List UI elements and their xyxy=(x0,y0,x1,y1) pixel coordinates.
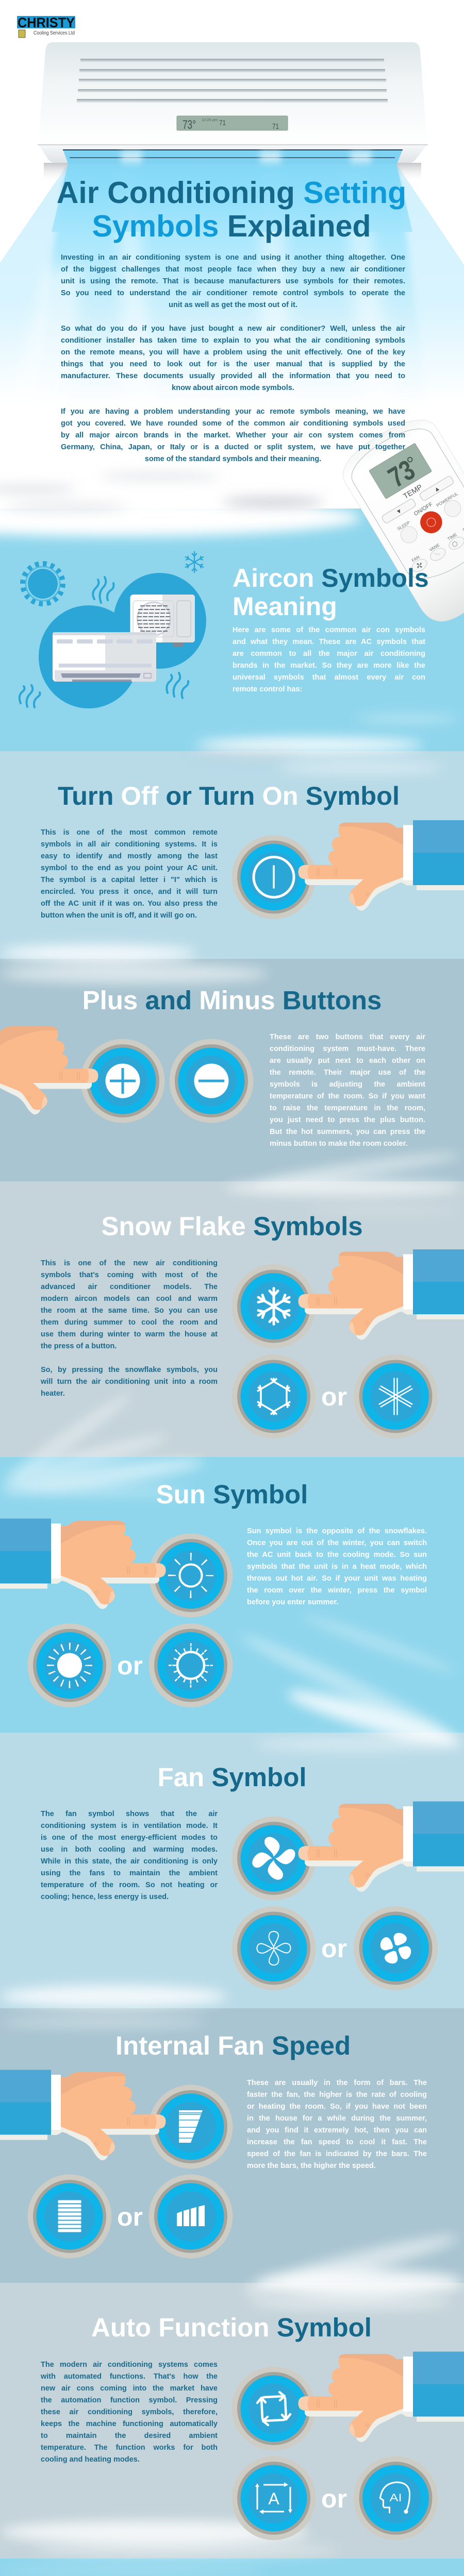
text: or: or xyxy=(321,1934,347,1963)
text block: intro: things that you need to look out for is the user manual that is supplied by the xyxy=(61,360,405,368)
text block: intro: unit is using the remote. That is because manufacturers use symbols for their remotes. xyxy=(61,277,405,285)
text block: internal fan speed: or heating the room. So, if you have not been xyxy=(247,2102,427,2110)
remote control, angled: SLEEP xyxy=(396,520,411,532)
text block: intro: Investing in an air conditioning system is one and using it another thing altogether. One xyxy=(61,253,405,262)
panel: internal fan speed xyxy=(0,2031,351,2259)
button: ring sun xyxy=(148,1623,233,1707)
heading: Fan Symbol xyxy=(157,1762,307,1792)
panel: sun xyxy=(0,1480,308,1707)
icon: pressing hand xyxy=(299,820,464,911)
icon: pressing hand xyxy=(299,1249,464,1340)
button: auto arrows xyxy=(232,2367,316,2450)
button: solid sun xyxy=(28,1623,111,1707)
unit display xyxy=(177,116,288,132)
button: AI head xyxy=(354,2456,438,2540)
text block: turn off or on: button when the unit is off, and it will go on. xyxy=(41,911,197,920)
button: fan speed bars xyxy=(148,2084,233,2169)
text block: turn off or on: This is one of the most common remote xyxy=(41,828,218,837)
heading: meaning: Meaning xyxy=(233,592,337,621)
text block: aircon symbols meaning: are common to all the major air conditioning xyxy=(233,650,425,658)
text block: sun: Once you are out of the winter, you can switch xyxy=(247,1539,427,1547)
remote control, angled: FAN xyxy=(411,554,421,563)
button: fan xyxy=(232,1817,316,1900)
heading: aircon symbols: Aircon Symbols xyxy=(233,564,429,592)
text block: snow flake: will turn the air conditioning unit into a room xyxy=(41,1378,218,1386)
text block: internal fan speed: increase the fan speed to cool it fast. The xyxy=(247,2138,427,2146)
button: asterisk flake xyxy=(354,1354,438,1438)
remote control, angled: 73 xyxy=(383,453,420,494)
outdoor unit xyxy=(130,595,195,647)
panel: plus and minus xyxy=(0,986,382,1123)
text block: internal fan speed: These are usually in the form of bars. The xyxy=(247,2078,427,2087)
unit display: 71 xyxy=(219,118,226,127)
text block: intro: by all major aircon brands in the market. Whether your air con system comes from xyxy=(61,431,405,439)
text block: plus and minus: But the hot summers, you can press the xyxy=(270,1127,425,1136)
button: auto A xyxy=(232,2456,316,2540)
heading: Plus and Minus Buttons xyxy=(82,986,382,1015)
heading: Internal Fan Speed xyxy=(115,2031,351,2060)
text block: intro: If you are having a problem understanding your ac remote symbols meaning, we have xyxy=(61,408,405,416)
text: or: or xyxy=(321,2484,347,2513)
remote control, angled: VANE xyxy=(428,542,441,552)
text block: plus and minus: you just need to press the plus button. xyxy=(270,1116,425,1124)
text block: turn off or on: easy to identify and mostly among the last xyxy=(41,852,218,860)
button: solid fan xyxy=(354,1906,438,1990)
text block: fan: While in this state, the air conditioning is only xyxy=(41,1857,218,1866)
icon: pressing hand xyxy=(299,2351,464,2442)
text block: auto function: with automated functions. That's how the xyxy=(41,2372,218,2380)
text block: auto function: the automation function symbol. Pressing xyxy=(41,2396,218,2404)
text block: internal fan speed: more the bars, the higher the speed. xyxy=(247,2162,376,2170)
remote control, angled: ▼ xyxy=(396,509,402,515)
text: or: or xyxy=(321,1382,347,1411)
text block: snow flake: This is one of the new air conditioning xyxy=(41,1259,218,1267)
text block: sun: before you enter summer. xyxy=(247,1598,338,1606)
logo: Cooling Services Ltd xyxy=(34,30,75,36)
indoor unit xyxy=(53,632,156,682)
main title: Air Conditioning Setting xyxy=(57,176,406,210)
remote control, angled: ▲ xyxy=(434,486,440,493)
text block: sun: throws out hot air. So if your unit was heating xyxy=(247,1574,427,1583)
text block: snow flake: the press of a button. xyxy=(41,1342,117,1350)
remote control, angled: ° xyxy=(404,452,421,475)
text block: intro: manufacturer. These documents usually provided all the information that you need to xyxy=(61,372,405,380)
button: plus xyxy=(80,1039,165,1123)
text block: snow flake: advanced air conditioner models. The xyxy=(41,1283,218,1291)
text block: plus and minus: These are two buttons that every air xyxy=(270,1032,425,1041)
text block: intro: on the remote means, you will have a problem using the unit effectively. One of the key xyxy=(61,348,405,357)
text: or: or xyxy=(117,2202,143,2231)
text block: plus and minus: conditioning system must-have. There xyxy=(270,1045,425,1053)
text block: aircon symbols meaning: and what they mean. These are AC symbols that xyxy=(233,638,425,646)
icon: pressing hand xyxy=(0,2070,165,2160)
text block: auto function: cooling and heating modes. xyxy=(41,2455,140,2464)
text block: plus and minus: temperature of the room. So if you want xyxy=(270,1092,425,1100)
text block: fan xyxy=(41,1810,365,1901)
text block: internal fan speed: speed of the fan is indicated by the bars. The xyxy=(247,2149,427,2158)
panel: auto function xyxy=(91,2313,464,2540)
text block: snow flake: the room at the same time. So you can use xyxy=(41,1307,218,1315)
button: minus xyxy=(169,1039,254,1123)
text block: auto function: The modern air conditioning systems comes xyxy=(41,2361,218,2369)
text block: turn off or on: encircled. You press it once, and it will turn xyxy=(41,888,218,896)
text block: plus and minus xyxy=(270,1032,425,1148)
button: bar stack xyxy=(28,2174,111,2259)
logo xyxy=(17,15,75,38)
logo: CHRISTY xyxy=(18,15,75,30)
text block: plus and minus: symbols is adjusting the ambient xyxy=(270,1080,425,1088)
text block: plus and minus: the remote. Their major use of the xyxy=(270,1069,425,1077)
remote control, angled: POWERFUL xyxy=(436,491,459,508)
text block: internal fan speed: and you find it extremely hot, then you can xyxy=(247,2126,427,2134)
text block: intro: unit as well as get the most out of it. xyxy=(169,301,297,309)
unit display: 12:25 pm xyxy=(202,117,218,122)
text block: fan: The fan symbol shows that the air xyxy=(41,1810,218,1818)
text block: intro: Germany, China, Japan, or Italy or is a ducted or split system, we have put together xyxy=(61,443,405,451)
button: hexagon flake xyxy=(232,1354,316,1438)
text block: aircon symbols meaning: brands in the market. So they are more like the xyxy=(233,662,425,670)
text block: snow flake: So, by pressing the snowflake symbols, you xyxy=(41,1365,218,1374)
text block: auto function: new air cons coming into the market have xyxy=(41,2384,218,2393)
text block: fan: using the fans to maintain the ambient xyxy=(41,1869,218,1877)
text block: internal fan speed: in the house for a while during the summer, xyxy=(247,2114,427,2123)
heading: Turn Off or Turn On Symbol xyxy=(58,781,400,810)
text block: snow flake: symbols that's coming with most of the xyxy=(41,1270,218,1279)
unit display: 71 xyxy=(272,122,279,131)
cold air beam under the unit xyxy=(0,164,464,407)
text block: intro: So you need to understand the air conditioner remote control symbols to operate the xyxy=(61,289,405,297)
text block: intro: some of the standard symbols and their meaning. xyxy=(145,455,321,463)
text block: sun: Sun symbol is the opposite of the snowflakes. xyxy=(247,1527,427,1535)
text block: sun: the room over the winter, press the symbol xyxy=(247,1586,427,1595)
text block: sun xyxy=(247,1527,427,1606)
remote control, angled: TEMP xyxy=(402,483,424,501)
text block: sun: symbols that the unit is in a heat mode, which xyxy=(247,1563,427,1571)
text block: fan: conditioning system is in ventilation mode. It xyxy=(41,1822,218,1830)
panel: snow flake xyxy=(101,1212,464,1438)
text block: plus and minus: are usually put next to each other on xyxy=(270,1056,425,1064)
text block: aircon symbols meaning: remote control has: xyxy=(233,685,302,693)
icon: sun xyxy=(23,564,63,604)
text block: intro: So what do you do if you have just bought a new air conditioner? Well, unless the air xyxy=(61,325,405,333)
text block: intro: know about aircon mode symbols. xyxy=(172,384,294,392)
remote control, angled xyxy=(333,408,464,631)
text block: turn off or on: symbol to the end as you point your AC unit. xyxy=(41,864,218,872)
button: power xyxy=(232,835,316,919)
text block: internal fan speed: faster the fan, the higher is the rate of cooling xyxy=(247,2091,427,2099)
text block: aircon symbols meaning xyxy=(233,626,425,693)
illustration: heating and cooling units xyxy=(20,551,206,708)
remote control, angled: ON/OFF xyxy=(413,501,434,517)
heading: Snow Flake Symbols xyxy=(101,1212,363,1241)
text block: turn off or on: symbols in all air conditioning systems. It is xyxy=(41,840,218,849)
text block: aircon symbols meaning: universal symbols that almost every air con xyxy=(233,673,425,682)
unit display: 73° xyxy=(183,118,196,132)
heading: Auto Function Symbol xyxy=(91,2313,372,2342)
text block: internal fan speed xyxy=(247,2078,427,2170)
air conditioner unit xyxy=(38,42,428,232)
panel: fan xyxy=(157,1762,464,1990)
text block: fan: temperature of the room. So not heating or xyxy=(41,1881,218,1889)
text block: intro: got you covered. We have rounded some of the common air conditioning symbols used xyxy=(61,419,405,428)
main title line two: Symbols Explained xyxy=(92,209,371,243)
text block: snow flake: heater. xyxy=(41,1389,65,1397)
text block: auto function: temperature. The function works for both xyxy=(41,2443,218,2451)
icon: pressing hand xyxy=(0,1519,165,1609)
button: snowflake xyxy=(232,1264,316,1348)
text block: intro: conditioner installer has taken time to explain to you what the air conditioning symbols xyxy=(61,336,405,345)
clouds at band edges xyxy=(0,715,464,2576)
text block: aircon symbols meaning: Here are some of the common air con symbols xyxy=(233,626,425,634)
text block: auto function: these air conditioning symbols, therefore, xyxy=(41,2408,218,2416)
text block: auto function xyxy=(41,2361,368,2464)
button: outline fan xyxy=(232,1906,316,1990)
text block: turn off or on xyxy=(41,828,365,920)
text block: turn off or on: The symbol is a capital letter i "I" which is xyxy=(41,876,218,884)
icon: pressing hand xyxy=(299,1801,464,1892)
text block: snow flake: them during summer to cool the room and xyxy=(41,1318,218,1326)
icon: heat waves xyxy=(20,577,188,707)
text block: auto function: keeps the machine functioning automatically xyxy=(41,2419,218,2428)
button: auto A: A xyxy=(268,2489,279,2508)
text: or: or xyxy=(117,1651,143,1680)
text block: auto function: to maintain the desired ambient xyxy=(41,2432,218,2440)
text block: fan: is one of the most energy-efficient modes to xyxy=(41,1834,218,1842)
icon: pressing hand xyxy=(0,1026,98,1114)
button: sun xyxy=(148,1533,233,1618)
text block: sun: the AC unit back to the cooling mode. So sun xyxy=(247,1551,427,1559)
heading: Sun Symbol xyxy=(156,1480,308,1509)
text block: fan: use in both cooling and warming modes. xyxy=(41,1845,218,1854)
text block: plus and minus: to raise the temperature in the room, xyxy=(270,1104,425,1112)
text block: fan: cooling; hence, less energy is used. xyxy=(41,1893,169,1901)
text block: snow flake xyxy=(41,1259,218,1397)
text block: turn off or on: off the AC unit if it was on. You also press the xyxy=(41,900,218,908)
remote control, angled: TIME xyxy=(446,532,458,541)
button: rising bars xyxy=(148,2174,233,2259)
text block: snow flake: use them during winter to warm the house at xyxy=(41,1330,218,1338)
text block: intro xyxy=(61,253,405,463)
clouds between intro and aircon band xyxy=(0,473,361,536)
text block: snow flake: modern aircon models can cool and warm xyxy=(41,1294,218,1302)
text block: plus and minus: minus button to make the room cooler. xyxy=(270,1140,407,1148)
button: AI head: AI xyxy=(390,2492,402,2504)
panel: turn off or turn on xyxy=(58,781,464,919)
icon: snowflake xyxy=(185,551,204,573)
text block: intro: of the biggest challenges that most people face when they buy a new air conditioner xyxy=(61,265,405,274)
